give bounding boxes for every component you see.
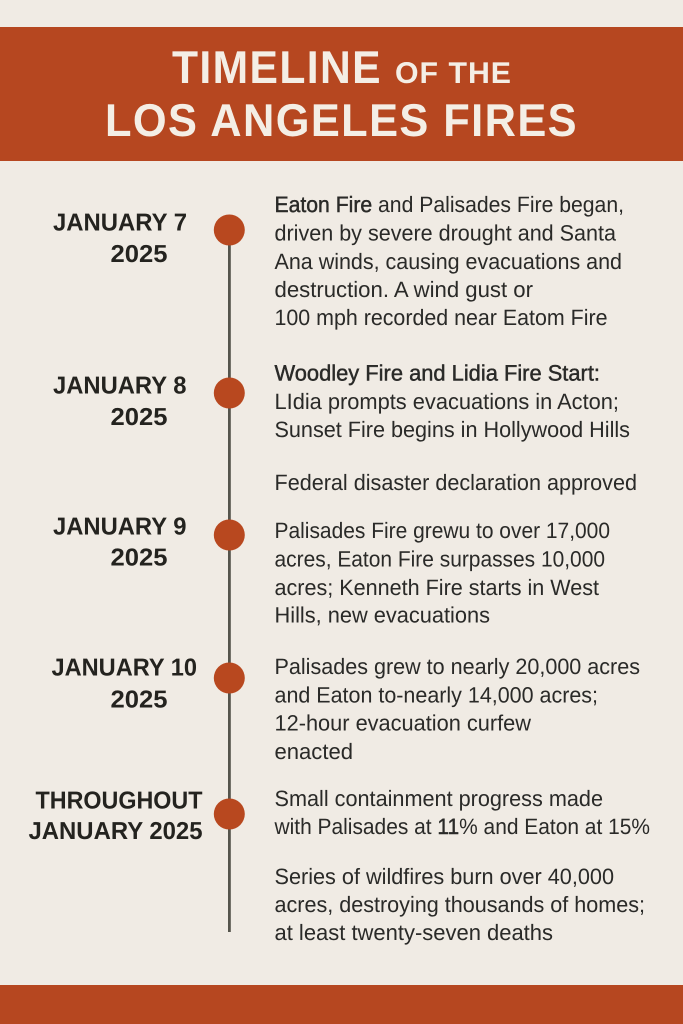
date: January 10 bbox=[52, 654, 197, 714]
date: Throughout January 2025 bbox=[28, 788, 203, 845]
timeline dot: January 8 bbox=[214, 378, 245, 408]
date: January 10: 2025 bbox=[110, 686, 168, 714]
date: January 7 bbox=[53, 210, 187, 268]
text: January 8 events bbox=[274, 360, 630, 442]
title: OF THE bbox=[395, 57, 512, 90]
text: containment progress: Small containment progress made bbox=[274, 786, 603, 811]
text: overall toll: acres, destroying thousands of homes; bbox=[274, 892, 645, 917]
text: January 9 events: Hills, new evacuations bbox=[274, 602, 490, 628]
timeline dot: Throughout January bbox=[214, 798, 245, 830]
text: January 7 events bbox=[274, 192, 624, 330]
text: January 9 events: acres, Eaton Fire surpasses 10,000 bbox=[274, 546, 605, 572]
timeline dot: January 10 bbox=[214, 662, 245, 694]
date: January 8: 2025 bbox=[110, 404, 168, 431]
text: January 7 events: Ana winds, causing evacuations and bbox=[274, 249, 622, 274]
text: containment progress bbox=[274, 786, 650, 839]
date: January 9 bbox=[53, 514, 186, 572]
text: overall toll: at least twenty-seven deaths bbox=[274, 920, 553, 945]
text: overall toll bbox=[274, 864, 645, 945]
date: January 7: JANUARY 7 bbox=[53, 210, 187, 236]
date: Throughout January 2025: JANUARY 2025 bbox=[28, 818, 202, 845]
text: January 8 events: LIdia prompts evacuations in Acton; bbox=[274, 389, 619, 414]
title: LOS ANGELES FIRES bbox=[105, 94, 578, 146]
text: January 10 events: enacted bbox=[274, 739, 353, 764]
text: January 8 events: Sunset Fire begins in Hollywood Hills bbox=[274, 417, 630, 442]
text: January 10 events: 12-hour evacuation curfew bbox=[274, 710, 532, 736]
text: January 7 events: 100 mph recorded near Eatom Fire bbox=[274, 305, 608, 330]
text: January 7 events: destruction. A wind gust or bbox=[274, 277, 534, 302]
title: TIMELINE bbox=[172, 41, 382, 93]
title bbox=[105, 41, 578, 146]
date: January 8: JANUARY 8 bbox=[53, 372, 186, 400]
date: January 10: JANUARY 10 bbox=[52, 654, 197, 682]
text: January 9 events: Palisades Fire grewu to over 17,000 bbox=[274, 518, 610, 543]
text: January 10 events: Palisades grew to nearly 20,000 acres bbox=[274, 654, 640, 679]
timeline dot: January 9 bbox=[214, 520, 245, 550]
date: January 7: 2025 bbox=[110, 241, 168, 268]
date: January 8 bbox=[53, 372, 186, 431]
text: January 7 events: driven by severe drought and Santa bbox=[274, 220, 617, 246]
text: January 8 events: Woodley Fire and Lidia Fire Start: bbox=[274, 360, 600, 386]
text: January 10 events: and Eaton to-nearly 14,000 acres; bbox=[274, 682, 598, 708]
text: January 9 events: acres; Kenneth Fire starts in West bbox=[274, 575, 599, 600]
timeline line bbox=[228, 230, 231, 932]
text: overall toll: Series of wildfires burn over 40,000 bbox=[274, 864, 614, 889]
date: January 9: JANUARY 9 bbox=[53, 514, 186, 540]
text: containment progress: with Palisades at 11% and Eaton at 15% bbox=[274, 814, 650, 839]
text: January 10 events bbox=[274, 654, 640, 764]
text: January 7 events: Eaton Fire and Palisades Fire began, bbox=[274, 192, 624, 217]
text: federal declaration: Federal disaster declaration approved bbox=[274, 470, 637, 495]
text: January 9 events bbox=[274, 518, 610, 628]
date: Throughout January 2025: THROUGHOUT bbox=[36, 788, 203, 814]
footer band bbox=[0, 985, 683, 1024]
timeline dot: January 7 bbox=[214, 214, 245, 246]
header band bbox=[0, 27, 683, 161]
date: January 9: 2025 bbox=[110, 544, 168, 572]
